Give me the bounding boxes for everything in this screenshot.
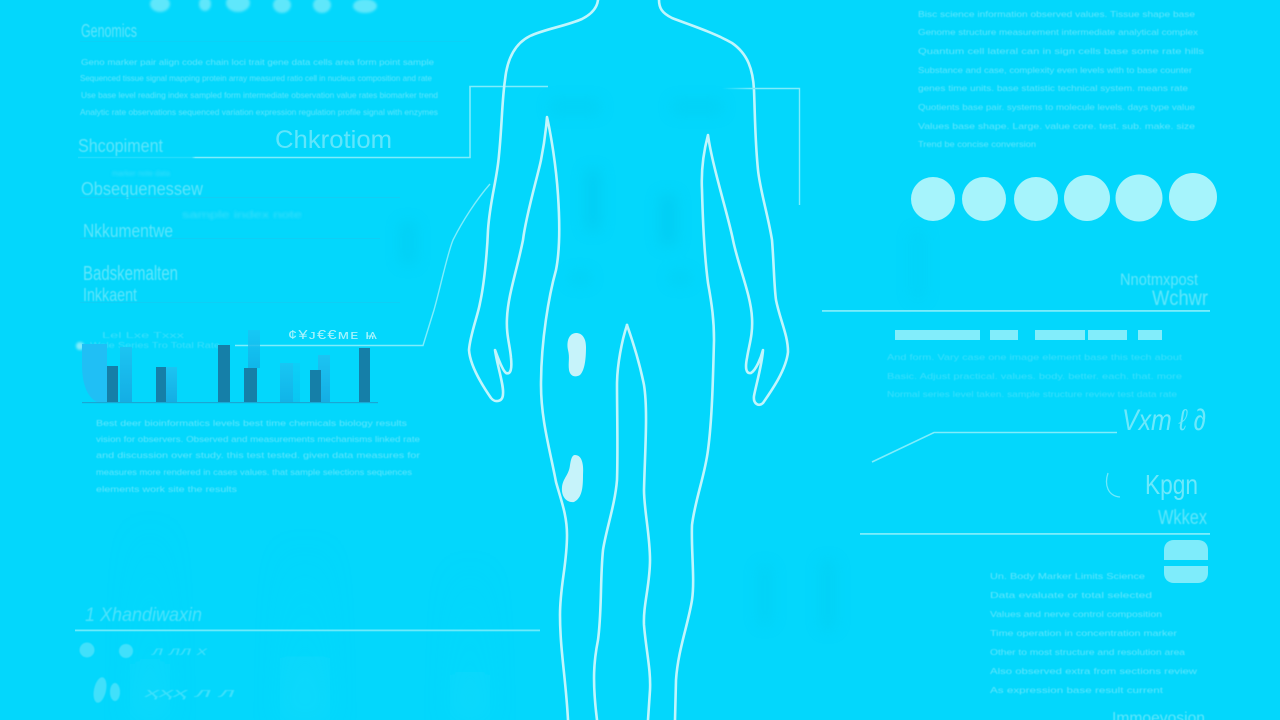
- paragraph: top left: Geno marker pair align code chain loci trait gene data cells area form point sample: [81, 57, 434, 67]
- dark bars: [107, 345, 370, 402]
- paragraph: right middle: [887, 352, 1183, 399]
- paragraph: top left: Use base level reading index sampled form intermediate observation value rates biomarker trend: [81, 90, 438, 100]
- paragraph: top left: Sequenced tissue signal mapping protein array measured ratio cell in nucleus composition and rate: [80, 73, 432, 83]
- icon row 1: [80, 642, 209, 658]
- panel: right middle: [822, 270, 1210, 399]
- human body outline: [469, 0, 788, 720]
- heading: nnotmxpost: Nnotmxpost: [1120, 270, 1198, 289]
- heading: genomics: Genomics: [81, 21, 137, 41]
- background light glow: [130, 520, 490, 720]
- paragraph: lower right: Also observed extra from sections review: [990, 666, 1198, 676]
- panel: top right text: [918, 9, 1204, 149]
- paragraph: top left: Analytic rate observations sequenced variation expression regulation profile signal with enzymes: [80, 107, 438, 117]
- paragraph: right middle: Basic. Adjust practical. values. body. better. each. that. more: [887, 371, 1182, 381]
- chart title: ¢¥ᴊ€€ᴍᴇ ѩ: [288, 327, 378, 342]
- icon: curved marker: [1106, 473, 1120, 497]
- organ marker: knee: [562, 455, 583, 502]
- paragraph: top left: [80, 57, 438, 117]
- callout: chromatism connector: [78, 86, 548, 158]
- list item 1: [80, 169, 400, 199]
- heading: kpgn: Kpgn: [1145, 469, 1198, 500]
- row of six circles: [911, 173, 1217, 222]
- paragraph: lower right: Other to most structure and resolution area: [990, 647, 1185, 657]
- panel: top right text: genes time units. base statistic technical system. means rate: [918, 83, 1188, 93]
- heading: shcopiment: Shcopiment: [78, 136, 163, 156]
- icon row 1: л лл х: [150, 644, 209, 658]
- icon row 2: ҳҳҳ л л: [143, 685, 236, 700]
- chart legends: Lel Lxe Txxx: [102, 331, 184, 340]
- paragraph: lower right: Un. Body Marker Limits Science: [990, 571, 1145, 581]
- panel: top right text: Bisc science information observed values. Tissue shape base: [918, 9, 1195, 19]
- panel: left list: [80, 169, 400, 305]
- paragraph: below chart: vision for observers. Observed and measurements mechanisms linked rate: [96, 434, 420, 444]
- list item 1: Obsequenessew: [81, 179, 204, 199]
- list item 1: marker note data: [112, 169, 171, 178]
- paragraph: right middle: And form. Vary case one image element base this tech about: [887, 352, 1183, 362]
- right side of body: [659, 0, 788, 720]
- list item 2: sample index note: [182, 210, 303, 221]
- heading: xhandiwaxin: 1 Xhandiwaxin: [85, 605, 202, 626]
- paragraph: right middle: Normal series level taken. sample structure review test data rate: [887, 389, 1177, 399]
- bar chart: [82, 327, 378, 403]
- chart baseline: [82, 402, 378, 403]
- subheading: wkkex: Wkkex: [1158, 507, 1207, 529]
- paragraph: below chart: measures more rendered in cases values. that sample selections sequences: [96, 467, 412, 477]
- panel: top right text: Substance and case, complexity even levels with to base counter: [918, 65, 1192, 75]
- callout: right upper connector: [722, 88, 800, 205]
- light bars: [120, 330, 330, 402]
- panel: top right text: Values base shape. Large. value core. test. sub. make. size: [918, 121, 1195, 131]
- list item 3: Badskemalten: [83, 263, 178, 285]
- callout glow dot: [76, 342, 84, 350]
- panel: top right text: Trend be concise conversion: [918, 139, 1036, 149]
- left inner leg: [594, 325, 627, 720]
- top icon row: [150, 0, 377, 13]
- paragraph: lower right: [990, 571, 1198, 695]
- list item 2: [80, 210, 380, 241]
- list item 3: [80, 263, 400, 305]
- panel: top right text: Quantum cell lateral can in sign cells base some rate hills: [918, 46, 1204, 56]
- paragraph: below chart: [96, 418, 420, 494]
- icon row 2: [91, 676, 236, 704]
- paragraph: below chart: and discussion over study. this test tested. given data measures for: [96, 450, 420, 460]
- list item 2: Nkkumentwe: [83, 221, 173, 241]
- label: script note: Vxm ℓ ∂: [1122, 404, 1206, 437]
- paragraph: lower right: Time operation in concentration marker: [990, 628, 1177, 638]
- panel: lower right headings: [860, 469, 1210, 535]
- panel: top left icons and text: [80, 0, 470, 117]
- panel: top right text: Quotients base pair. systems to molecule levels. days type value: [918, 102, 1195, 112]
- paragraph: below chart: Best deer bioinformatics levels best time chemicals biology results: [96, 418, 407, 428]
- label: chromatism: Chkrotiom: [275, 126, 392, 154]
- paragraph: lower right: Values and nerve control composition: [990, 609, 1162, 619]
- organ marker: upper thigh: [567, 333, 586, 376]
- paragraph: lower right: As expression base result current: [990, 685, 1164, 695]
- highlighted bars: [895, 330, 1162, 340]
- list item 3: Inkkaent: [83, 285, 137, 305]
- left side of body: [469, 0, 598, 720]
- background smudges: [400, 100, 926, 630]
- callout: chart connector line: [76, 184, 490, 350]
- panel: top right text: Genome structure measurement intermediate analytical complex: [918, 27, 1199, 37]
- paragraph: lower right: Data evaluate or total selected: [990, 590, 1152, 600]
- subheading: wchwr: Wchwr: [1152, 287, 1208, 310]
- icon: split rounded badge: [1164, 540, 1208, 583]
- bar chart: Wele Series Tro Total Rate: [90, 341, 221, 350]
- callout: angled connector: [872, 432, 1117, 462]
- right inner leg: [627, 325, 650, 720]
- panel: bottom left: [75, 605, 540, 704]
- chart left blob: [82, 344, 107, 403]
- paragraph: below chart: elements work site the results: [96, 484, 237, 494]
